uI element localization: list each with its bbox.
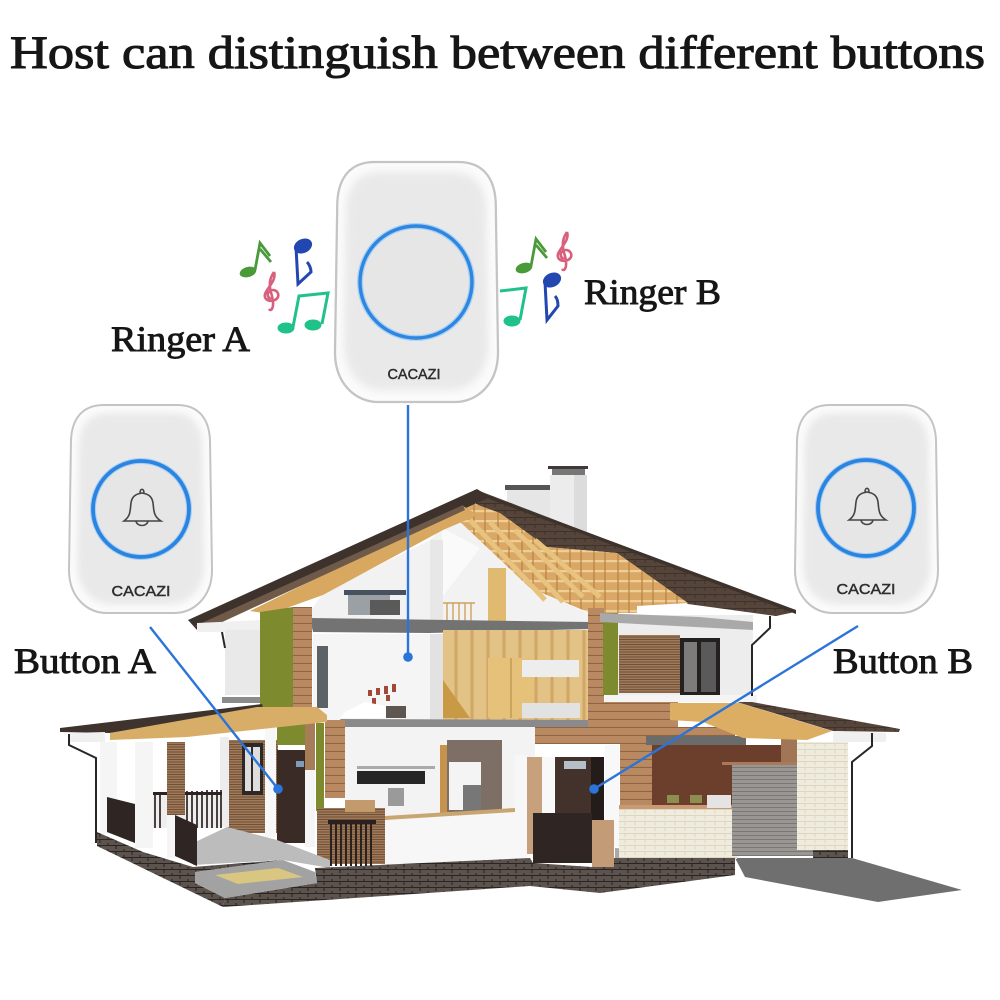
wooden room bbox=[443, 630, 589, 720]
house illustration bbox=[60, 466, 962, 907]
icon: pink clef bbox=[265, 272, 278, 310]
chimneys bbox=[505, 466, 588, 539]
main roof right side bbox=[470, 490, 795, 616]
porch floor bbox=[193, 827, 330, 868]
bunk furniture bbox=[344, 590, 406, 615]
exposed rafters right bbox=[455, 502, 688, 613]
white room bbox=[313, 634, 443, 720]
ringer device bbox=[335, 162, 498, 402]
icon: blue note bbox=[540, 270, 564, 320]
connector: button A to door bbox=[150, 627, 283, 794]
icon: teal double note bbox=[278, 293, 328, 334]
label: Ringer B: Ringer B bbox=[584, 272, 721, 312]
low white wall bbox=[385, 755, 527, 865]
icon: green note bbox=[514, 239, 547, 275]
garage bbox=[619, 736, 848, 859]
driveway bbox=[735, 858, 962, 902]
music notes: ringer A bbox=[238, 236, 328, 334]
icon: green note bbox=[238, 243, 271, 279]
front patio bbox=[195, 860, 317, 898]
lower roof left bbox=[60, 704, 327, 843]
button A device: CACAZI bbox=[112, 583, 170, 600]
icon: blue note bbox=[291, 236, 315, 284]
lower roof right bbox=[670, 702, 900, 858]
button B device: CACAZI bbox=[836, 581, 896, 598]
icon: bell bbox=[849, 488, 886, 524]
icon: teal note bbox=[500, 288, 526, 326]
main roof left strip bbox=[188, 489, 490, 630]
label: Button B: Button B bbox=[833, 641, 973, 681]
connector: button B to door bbox=[589, 626, 858, 794]
upper slab bbox=[310, 618, 590, 633]
downpipe upper right bbox=[752, 616, 770, 696]
connector: ringer to upper floor bbox=[403, 405, 413, 662]
button B device bbox=[795, 405, 938, 613]
right entry bbox=[527, 745, 690, 867]
floor slab bbox=[340, 719, 590, 727]
label: Button A: Button A bbox=[14, 641, 156, 681]
icon: pink clef bbox=[558, 232, 571, 270]
kitchen bbox=[345, 727, 535, 817]
front fence bbox=[328, 822, 376, 866]
gable interior wall bbox=[310, 518, 590, 630]
right wing upper bbox=[588, 608, 604, 720]
porch columns and fences bbox=[100, 737, 229, 866]
icon: bell bbox=[124, 489, 161, 526]
left lower wing bbox=[228, 740, 278, 833]
ringer device: CACAZI bbox=[388, 366, 440, 383]
music notes: ringer B bbox=[500, 232, 571, 326]
left wing upper bbox=[197, 620, 262, 632]
title: Host can distinguish between different buttons bbox=[10, 27, 985, 79]
label: Ringer A: Ringer A bbox=[111, 319, 250, 359]
brick foundation bbox=[97, 832, 735, 907]
button A device bbox=[69, 405, 212, 613]
upper wall behind right wing bbox=[618, 615, 753, 697]
